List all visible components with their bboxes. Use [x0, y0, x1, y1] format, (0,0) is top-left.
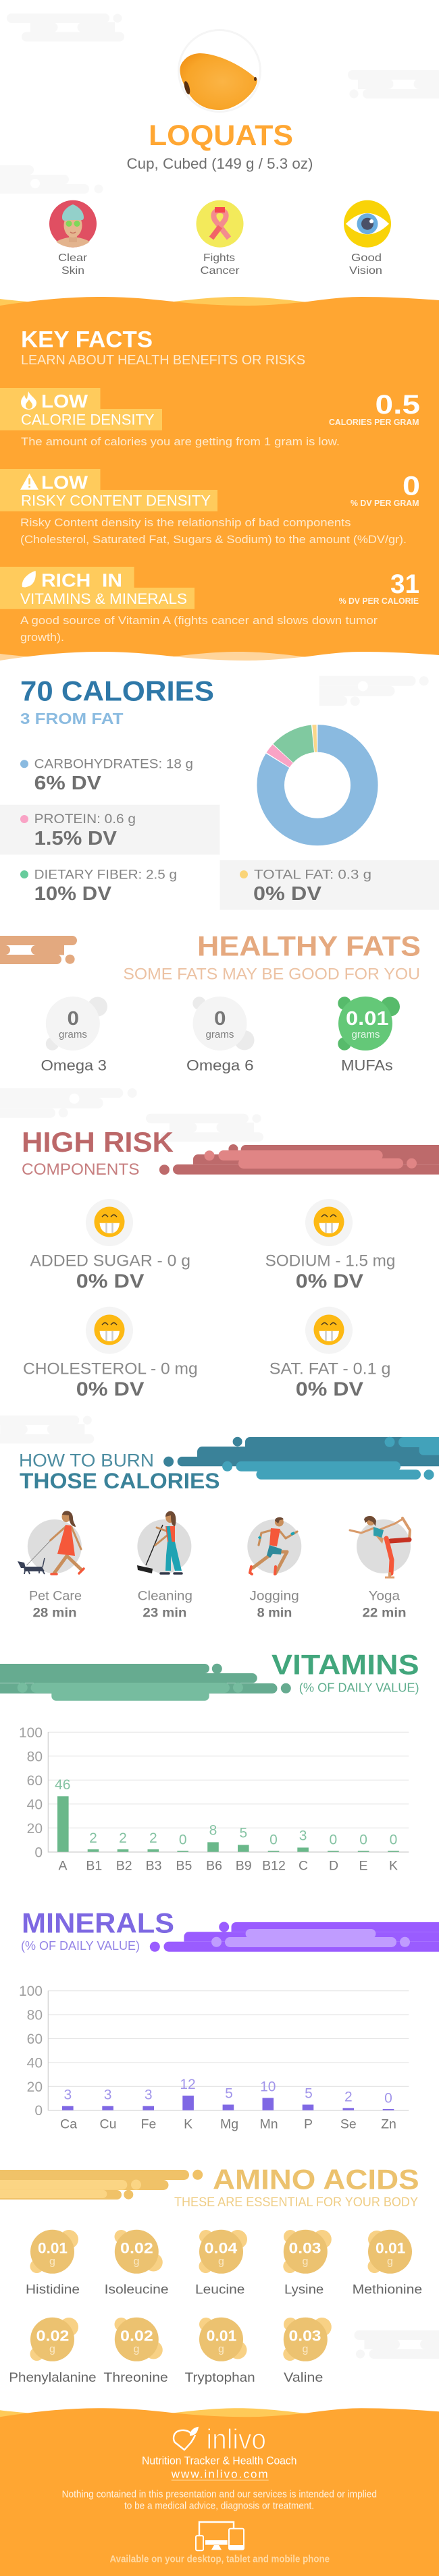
- stat: 31 percent DV per calorie: [339, 569, 419, 606]
- activity: jogging: 8 min: [257, 1606, 292, 1621]
- benefit: good vision: Vision: [349, 265, 382, 277]
- tag: low risky content density: [0, 469, 217, 511]
- bubble: omega 3: Omega 3: [41, 1057, 107, 1074]
- bar values: 2: [89, 1830, 97, 1846]
- amino: valine: Valine: [284, 2370, 323, 2385]
- description: [20, 615, 378, 644]
- stat: 0.5 calories per gram: CALORIES PER GRAM: [329, 417, 419, 427]
- amino: threonine: [103, 2318, 168, 2385]
- subheading: LEARN ABOUT HEALTH BENEFITS OR RISKS: [21, 353, 305, 368]
- legend: protein: [0, 805, 220, 855]
- amino: tryptophan: g: [218, 2344, 224, 2355]
- amino: leucine: g: [218, 2256, 224, 2268]
- footer: [0, 2408, 439, 2576]
- bar values: 8: [209, 1822, 217, 1838]
- x axis labels: B2: [116, 1858, 132, 1873]
- activity: pet care: 28 min: [32, 1606, 77, 1621]
- x axis labels: B12: [262, 1858, 286, 1873]
- bars: [62, 2096, 394, 2110]
- amino: phenylalanine: g: [49, 2344, 55, 2355]
- fruit photo: loquat in circle: [178, 30, 261, 112]
- label: LOW: [41, 472, 88, 493]
- x axis labels: B1: [86, 1858, 102, 1873]
- risk item: cholesterol: CHOLESTEROL - 0 mg: [23, 1360, 198, 1378]
- bubble: omega 6: 0: [214, 1008, 226, 1030]
- bar values: 12: [180, 2077, 196, 2092]
- x axis labels: D: [329, 1858, 338, 1873]
- bubble: omega 3: 0: [68, 1008, 79, 1030]
- background cloud amino: [354, 2330, 439, 2359]
- activity: cleaning: Cleaning: [138, 1589, 192, 1604]
- activity: cleaning: 23 min: [143, 1606, 186, 1621]
- subheading: (% OF DAILY VALUE): [299, 1681, 419, 1694]
- x axis labels: B6: [206, 1858, 222, 1873]
- amino: tryptophan: [185, 2318, 255, 2385]
- bar values: 3: [63, 2088, 72, 2103]
- stat: 31 percent DV per calorie: 31: [390, 569, 419, 599]
- legend: carbohydrates: [20, 757, 193, 794]
- bubble: omega 6: [186, 997, 254, 1074]
- amino: phenylalanine: 0.02: [36, 2327, 69, 2344]
- bubble: omega 3: grams: [59, 1029, 87, 1040]
- activity: jogging: [247, 1517, 301, 1621]
- amino: leucine: Leucine: [195, 2282, 244, 2297]
- activity: pet care: Pet Care: [29, 1589, 82, 1604]
- x axis labels: B3: [146, 1858, 162, 1873]
- subheading: (% OF DAILY VALUE): [21, 1939, 140, 1953]
- icon: woman walking dog: [18, 1511, 84, 1574]
- bar values: 0: [269, 1832, 278, 1848]
- risk item: saturated fat: 0% DV: [296, 1378, 364, 1400]
- heading decoration: [163, 1437, 439, 1480]
- bar values: 3: [104, 2088, 111, 2103]
- bar values: 0: [179, 1832, 187, 1848]
- heading bold: THOSE CALORIES: [20, 1469, 220, 1493]
- risk item: cholesterol: 0% DV: [76, 1378, 145, 1400]
- y axis labels: 0: [34, 2103, 43, 2119]
- panel: minerals: [19, 1907, 439, 2131]
- label detail: CALORIE DENSITY: [21, 412, 155, 428]
- y axis labels: 80: [27, 1749, 43, 1765]
- activity: cleaning: [137, 1511, 192, 1621]
- x axis labels: Ca: [60, 2117, 77, 2131]
- heading decoration: [150, 1922, 439, 1952]
- icon: ribbon: [196, 200, 243, 248]
- bar values: 2: [149, 1830, 157, 1846]
- top wave: [0, 297, 439, 314]
- bubble: omega 6: grams: [205, 1029, 234, 1040]
- benefit: fights cancer: Cancer: [200, 265, 240, 277]
- amino: histidine: g: [49, 2256, 55, 2268]
- amino: lysine: [283, 2230, 332, 2297]
- amino: valine: g: [303, 2344, 308, 2355]
- bubble: omega 6: Omega 6: [186, 1057, 254, 1074]
- legend: total fat: TOTAL FAT: 0.3 g: [254, 868, 371, 882]
- legend: dietary fiber: DIETARY FIBER: 2.5 g: [34, 868, 177, 882]
- description: A good source of Vitamin A (fights cancer and slows down tumor: [20, 615, 378, 627]
- bubble: MUFAs: grams: [351, 1029, 380, 1040]
- bar values: 0: [384, 2091, 392, 2106]
- bubble: MUFAs: MUFAs: [341, 1057, 393, 1074]
- panel: vitamins: [0, 1649, 419, 1873]
- bubble: MUFAs: [338, 997, 400, 1074]
- x axis labels: Mg: [220, 2117, 238, 2131]
- icon: man jogging: [250, 1517, 297, 1574]
- amino: isoleucine: 0.02: [120, 2239, 153, 2256]
- stat: 0.5 calories per gram: 0.5: [376, 390, 420, 420]
- amino: tryptophan: 0.01: [207, 2327, 236, 2344]
- activity: yoga: [350, 1516, 411, 1621]
- heading: HIGH RISK: [22, 1126, 174, 1158]
- icon: grinning emoji: [95, 1206, 124, 1237]
- heading: AMINO ACIDS: [213, 2163, 419, 2195]
- background cloud calories: [319, 676, 429, 706]
- logo: inlivo heart and wordmark: inlivo: [207, 2423, 266, 2455]
- bar values: 5: [305, 2085, 313, 2101]
- bar values: 46: [55, 1777, 70, 1793]
- activity: yoga: Yoga: [369, 1589, 400, 1604]
- amino: methionine: g: [387, 2256, 393, 2268]
- icon: leaf: [22, 571, 36, 587]
- benefit: clear skin: Skin: [61, 265, 84, 277]
- bar values: 0: [390, 1832, 397, 1848]
- background cloud left: [0, 165, 103, 194]
- x axis labels: [60, 2117, 396, 2131]
- serving size: Cup, Cubed (149 g / 5.3 oz): [127, 155, 313, 172]
- x axis labels: Fe: [141, 2117, 156, 2131]
- y axis labels: 0: [34, 1845, 43, 1861]
- heading decoration: [0, 2170, 203, 2200]
- subheading: THESE ARE ESSENTIAL FOR YOUR BODY: [174, 2195, 418, 2210]
- stat: 0.5 calories per gram: [329, 390, 420, 427]
- icon: grinning emoji: [313, 1206, 344, 1237]
- bubble: omega 3: [41, 997, 107, 1074]
- amino: threonine: 0.02: [120, 2327, 153, 2344]
- x axis labels: A: [58, 1858, 68, 1873]
- disclaimer: [62, 2490, 377, 2512]
- amino: leucine: 0.04: [205, 2239, 238, 2256]
- stat: 0 percent DV per gram: 0: [403, 471, 420, 501]
- bar chart: vitamins: [19, 1725, 409, 1873]
- risk item: saturated fat: [269, 1307, 390, 1400]
- legend: total fat: 0% DV: [253, 883, 322, 905]
- bar values: 5: [225, 2085, 233, 2101]
- subheading: SOME FATS MAY BE GOOD FOR YOU: [123, 965, 420, 983]
- amino: lysine: 0.03: [289, 2239, 321, 2256]
- activity: pet care: [18, 1511, 84, 1621]
- legend: protein: PROTEIN: 0.6 g: [34, 812, 136, 827]
- subheading: COMPONENTS: [22, 1160, 139, 1179]
- heading decoration: [0, 936, 77, 964]
- stat: 0 percent DV per gram: % DV PER GRAM: [351, 498, 419, 508]
- heading: KEY FACTS: [21, 327, 153, 352]
- icon: flame: [21, 391, 36, 410]
- x axis labels: K: [184, 2117, 192, 2131]
- bar values: [63, 2077, 392, 2106]
- legend: protein: 1.5% DV: [34, 828, 118, 849]
- background cloud top left: [7, 13, 124, 42]
- panel: key facts: [0, 297, 439, 669]
- amino: lysine: Lysine: [284, 2282, 324, 2297]
- icon: woman sweeping: [137, 1511, 182, 1573]
- benefit: clear skin: [49, 200, 97, 277]
- background cloud right: [348, 70, 439, 99]
- description: growth).: [20, 632, 64, 644]
- x axis labels: Zn: [381, 2117, 396, 2131]
- amino: histidine: [26, 2230, 80, 2297]
- tagline: Nutrition Tracker & Health Coach: [142, 2455, 297, 2467]
- y axis labels: 40: [27, 1797, 43, 1812]
- background cloud mid: [146, 1114, 263, 1142]
- risk item: sodium: [265, 1199, 395, 1292]
- amino: isoleucine: Isoleucine: [105, 2282, 169, 2297]
- description: The amount of calories you are getting from 1 gram is low.: [21, 436, 340, 448]
- title: LOQUATS: [149, 119, 293, 152]
- icon: warning triangle: [20, 474, 38, 490]
- amino: methionine: 0.01: [376, 2239, 405, 2256]
- y axis labels: 20: [27, 1821, 43, 1837]
- icon: face with turban: [49, 200, 97, 248]
- tag: rich in vitamins and minerals: [0, 567, 195, 609]
- y axis labels: 100: [19, 1725, 43, 1741]
- bar values: [55, 1777, 397, 1848]
- y axis labels: 20: [27, 2079, 43, 2095]
- icon: woman in dancer pose: [350, 1516, 410, 1577]
- legend: dietary fiber: 10% DV: [34, 883, 112, 905]
- background cloud burn: [0, 1416, 94, 1444]
- risk item: added sugar: [30, 1199, 190, 1292]
- footer wave: [0, 2408, 439, 2576]
- legend: carbohydrates: 6% DV: [34, 773, 102, 794]
- heading: HEALTHY FATS: [197, 930, 421, 962]
- bar values: 10: [260, 2079, 276, 2094]
- amino: valine: [283, 2318, 332, 2385]
- bar values: 2: [344, 2090, 353, 2105]
- risk item: saturated fat: SAT. FAT - 0.1 g: [269, 1360, 390, 1378]
- heading: HOW TO BURN: [19, 1450, 154, 1470]
- x axis labels: Mn: [259, 2117, 278, 2131]
- disclaimer: Nothing contained in this presentation and our services is intended or implied: [62, 2490, 377, 2500]
- subheading: 3 FROM FAT: [20, 710, 124, 727]
- amino: histidine: 0.01: [38, 2239, 68, 2256]
- risk item: added sugar: 0% DV: [76, 1270, 145, 1292]
- y axis labels: [19, 1984, 43, 2119]
- amino: leucine: [195, 2230, 247, 2297]
- description: (Cholesterol, Saturated Fat, Sugars & Sodium) to the amount (%DV/gr).: [20, 534, 407, 546]
- bars: [57, 1796, 399, 1852]
- label: RICH IN: [41, 569, 122, 590]
- website link: www.inlivo.com: [171, 2467, 268, 2480]
- panel: healthy fats: [0, 930, 421, 1074]
- icon: devices: [196, 2522, 244, 2550]
- stat: 0 percent DV per gram: [351, 471, 420, 508]
- amino: histidine: Histidine: [26, 2282, 80, 2297]
- heading decoration: [0, 1664, 291, 1701]
- y axis labels: 80: [27, 2008, 43, 2023]
- amino: tryptophan: Tryptophan: [185, 2370, 255, 2385]
- y axis labels: 60: [27, 2032, 43, 2047]
- description: [20, 517, 407, 546]
- y axis labels: [19, 1725, 43, 1861]
- y axis labels: 60: [27, 1773, 43, 1789]
- bar values: 5: [239, 1825, 247, 1841]
- label: Fights: [203, 252, 235, 264]
- legend: carbohydrates: CARBOHYDRATES: 18 g: [34, 757, 193, 771]
- bar values: 3: [145, 2088, 153, 2103]
- amino: isoleucine: g: [134, 2256, 139, 2268]
- legend: total fat: [220, 860, 439, 910]
- amino: phenylalanine: Phenylalanine: [9, 2370, 97, 2385]
- availability note: Available on your desktop, tablet and mobile phone: [109, 2554, 330, 2565]
- risk item: sodium: 0% DV: [296, 1270, 364, 1292]
- label: LOW: [41, 391, 88, 412]
- amino: methionine: Methionine: [353, 2282, 422, 2297]
- bar chart: minerals: [19, 1984, 409, 2131]
- logo: inlivo heart and wordmark: [174, 2423, 266, 2455]
- amino: threonine: Threonine: [103, 2370, 168, 2385]
- bar values: 0: [330, 1832, 337, 1848]
- x axis labels: P: [304, 2117, 313, 2131]
- x axis labels: K: [389, 1858, 398, 1873]
- panel: amino acids: [0, 2163, 422, 2385]
- bar values: 2: [119, 1830, 127, 1846]
- donut chart: [271, 738, 364, 832]
- x axis labels: B9: [236, 1858, 252, 1873]
- label detail: RISKY CONTENT DENSITY: [21, 493, 211, 509]
- label detail: VITAMINS & MINERALS: [20, 590, 187, 607]
- x axis labels: E: [359, 1858, 368, 1873]
- bottom wave: [0, 652, 439, 669]
- risk item: added sugar: ADDED SUGAR - 0 g: [30, 1252, 190, 1270]
- label: Clear: [58, 252, 88, 264]
- background cloud mid left: [0, 1088, 137, 1118]
- risk item: sodium: SODIUM - 1.5 mg: [265, 1252, 395, 1270]
- amino: isoleucine: [105, 2230, 169, 2297]
- panel: calories: [0, 675, 439, 910]
- panel: high risk: [22, 1126, 439, 1400]
- activity: jogging: Jogging: [249, 1589, 299, 1604]
- amino: phenylalanine: [9, 2318, 97, 2385]
- heading: MINERALS: [22, 1907, 174, 1938]
- amino: methionine: [353, 2230, 422, 2297]
- heading: VITAMINS: [272, 1649, 419, 1681]
- panel: how to burn: [18, 1437, 439, 1621]
- y axis labels: 100: [19, 1984, 43, 1999]
- bar values: 0: [359, 1832, 367, 1848]
- label: Good: [351, 252, 382, 264]
- x axis labels: Cu: [100, 2117, 116, 2131]
- amino: threonine: g: [134, 2344, 139, 2355]
- activity: yoga: 22 min: [362, 1606, 407, 1621]
- tag: low calorie density: [0, 388, 162, 430]
- y axis labels: 40: [27, 2055, 43, 2071]
- bubble: MUFAs: 0.01: [346, 1008, 389, 1030]
- x axis labels: C: [299, 1858, 308, 1873]
- icon: grinning emoji: [313, 1314, 344, 1345]
- amino: valine: 0.03: [289, 2327, 321, 2344]
- x axis labels: B5: [176, 1858, 192, 1873]
- disclaimer: to be a medical advice, diagnosis or treatment.: [124, 2501, 314, 2512]
- x axis labels: Se: [340, 2117, 357, 2131]
- legend: dietary fiber: [20, 868, 177, 905]
- amino: lysine: g: [303, 2256, 308, 2268]
- x axis labels: [58, 1858, 398, 1873]
- icon: grinning emoji: [95, 1314, 124, 1345]
- benefit: good vision: [344, 200, 391, 277]
- benefit: fights cancer: [196, 200, 243, 277]
- risk item: cholesterol: [23, 1307, 198, 1400]
- stat: 31 percent DV per calorie: % DV PER CALORIE: [339, 596, 419, 606]
- description: Risky Content density is the relationship of bad components: [20, 517, 351, 529]
- heading decoration: [159, 1144, 439, 1175]
- icon: eye: [344, 200, 391, 248]
- bar values: 3: [299, 1828, 307, 1843]
- heading: 70 CALORIES: [20, 675, 214, 707]
